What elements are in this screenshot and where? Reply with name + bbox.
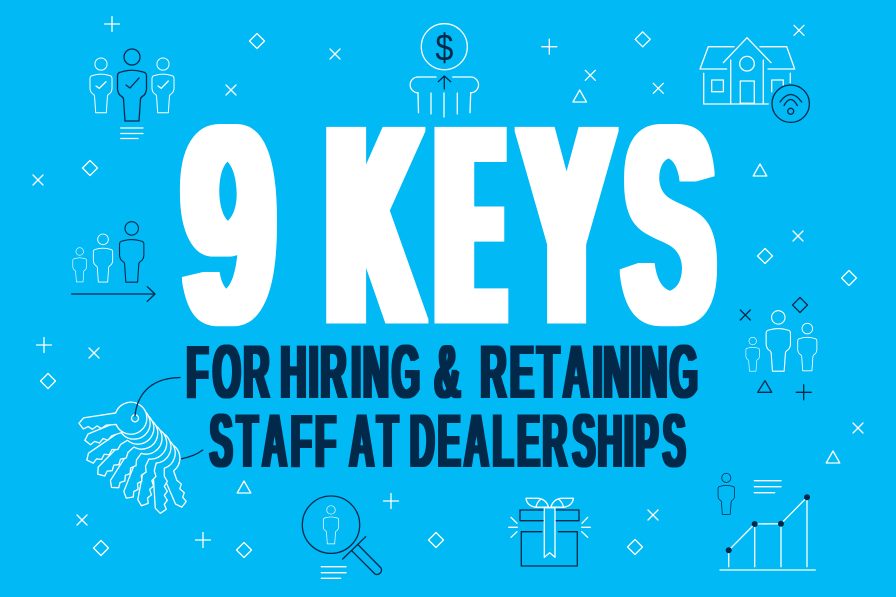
icon: magnifier over candidate bbox=[302, 496, 381, 578]
subtitle line 2: STAFF AT DEALERSHIPS bbox=[210, 400, 686, 484]
icon: house with wifi bbox=[700, 38, 809, 122]
title: 9 KEYS: 9 bbox=[182, 68, 275, 381]
icon: team of three with navy symbols bbox=[740, 298, 817, 400]
icon: three candidates with check marks bbox=[90, 49, 174, 138]
title: 9 KEYS: Y bbox=[522, 70, 611, 382]
title: 9 KEYS: S bbox=[624, 68, 714, 381]
title: 9 KEYS: E bbox=[443, 68, 498, 381]
title: 9 KEYS bbox=[182, 68, 714, 382]
icon: dollar coin on column bbox=[410, 24, 479, 117]
icon: bunch of nine keys bbox=[78, 378, 203, 513]
subtitle line 1: FOR HIRING & RETAINING bbox=[186, 329, 698, 415]
icon: gift box bbox=[509, 498, 590, 566]
icon: dollar coin on column: $ bbox=[435, 27, 454, 69]
icon: growing staff with arrow bbox=[72, 222, 155, 301]
icon: person with growth chart bbox=[718, 473, 815, 570]
title: 9 KEYS: K bbox=[329, 68, 419, 381]
